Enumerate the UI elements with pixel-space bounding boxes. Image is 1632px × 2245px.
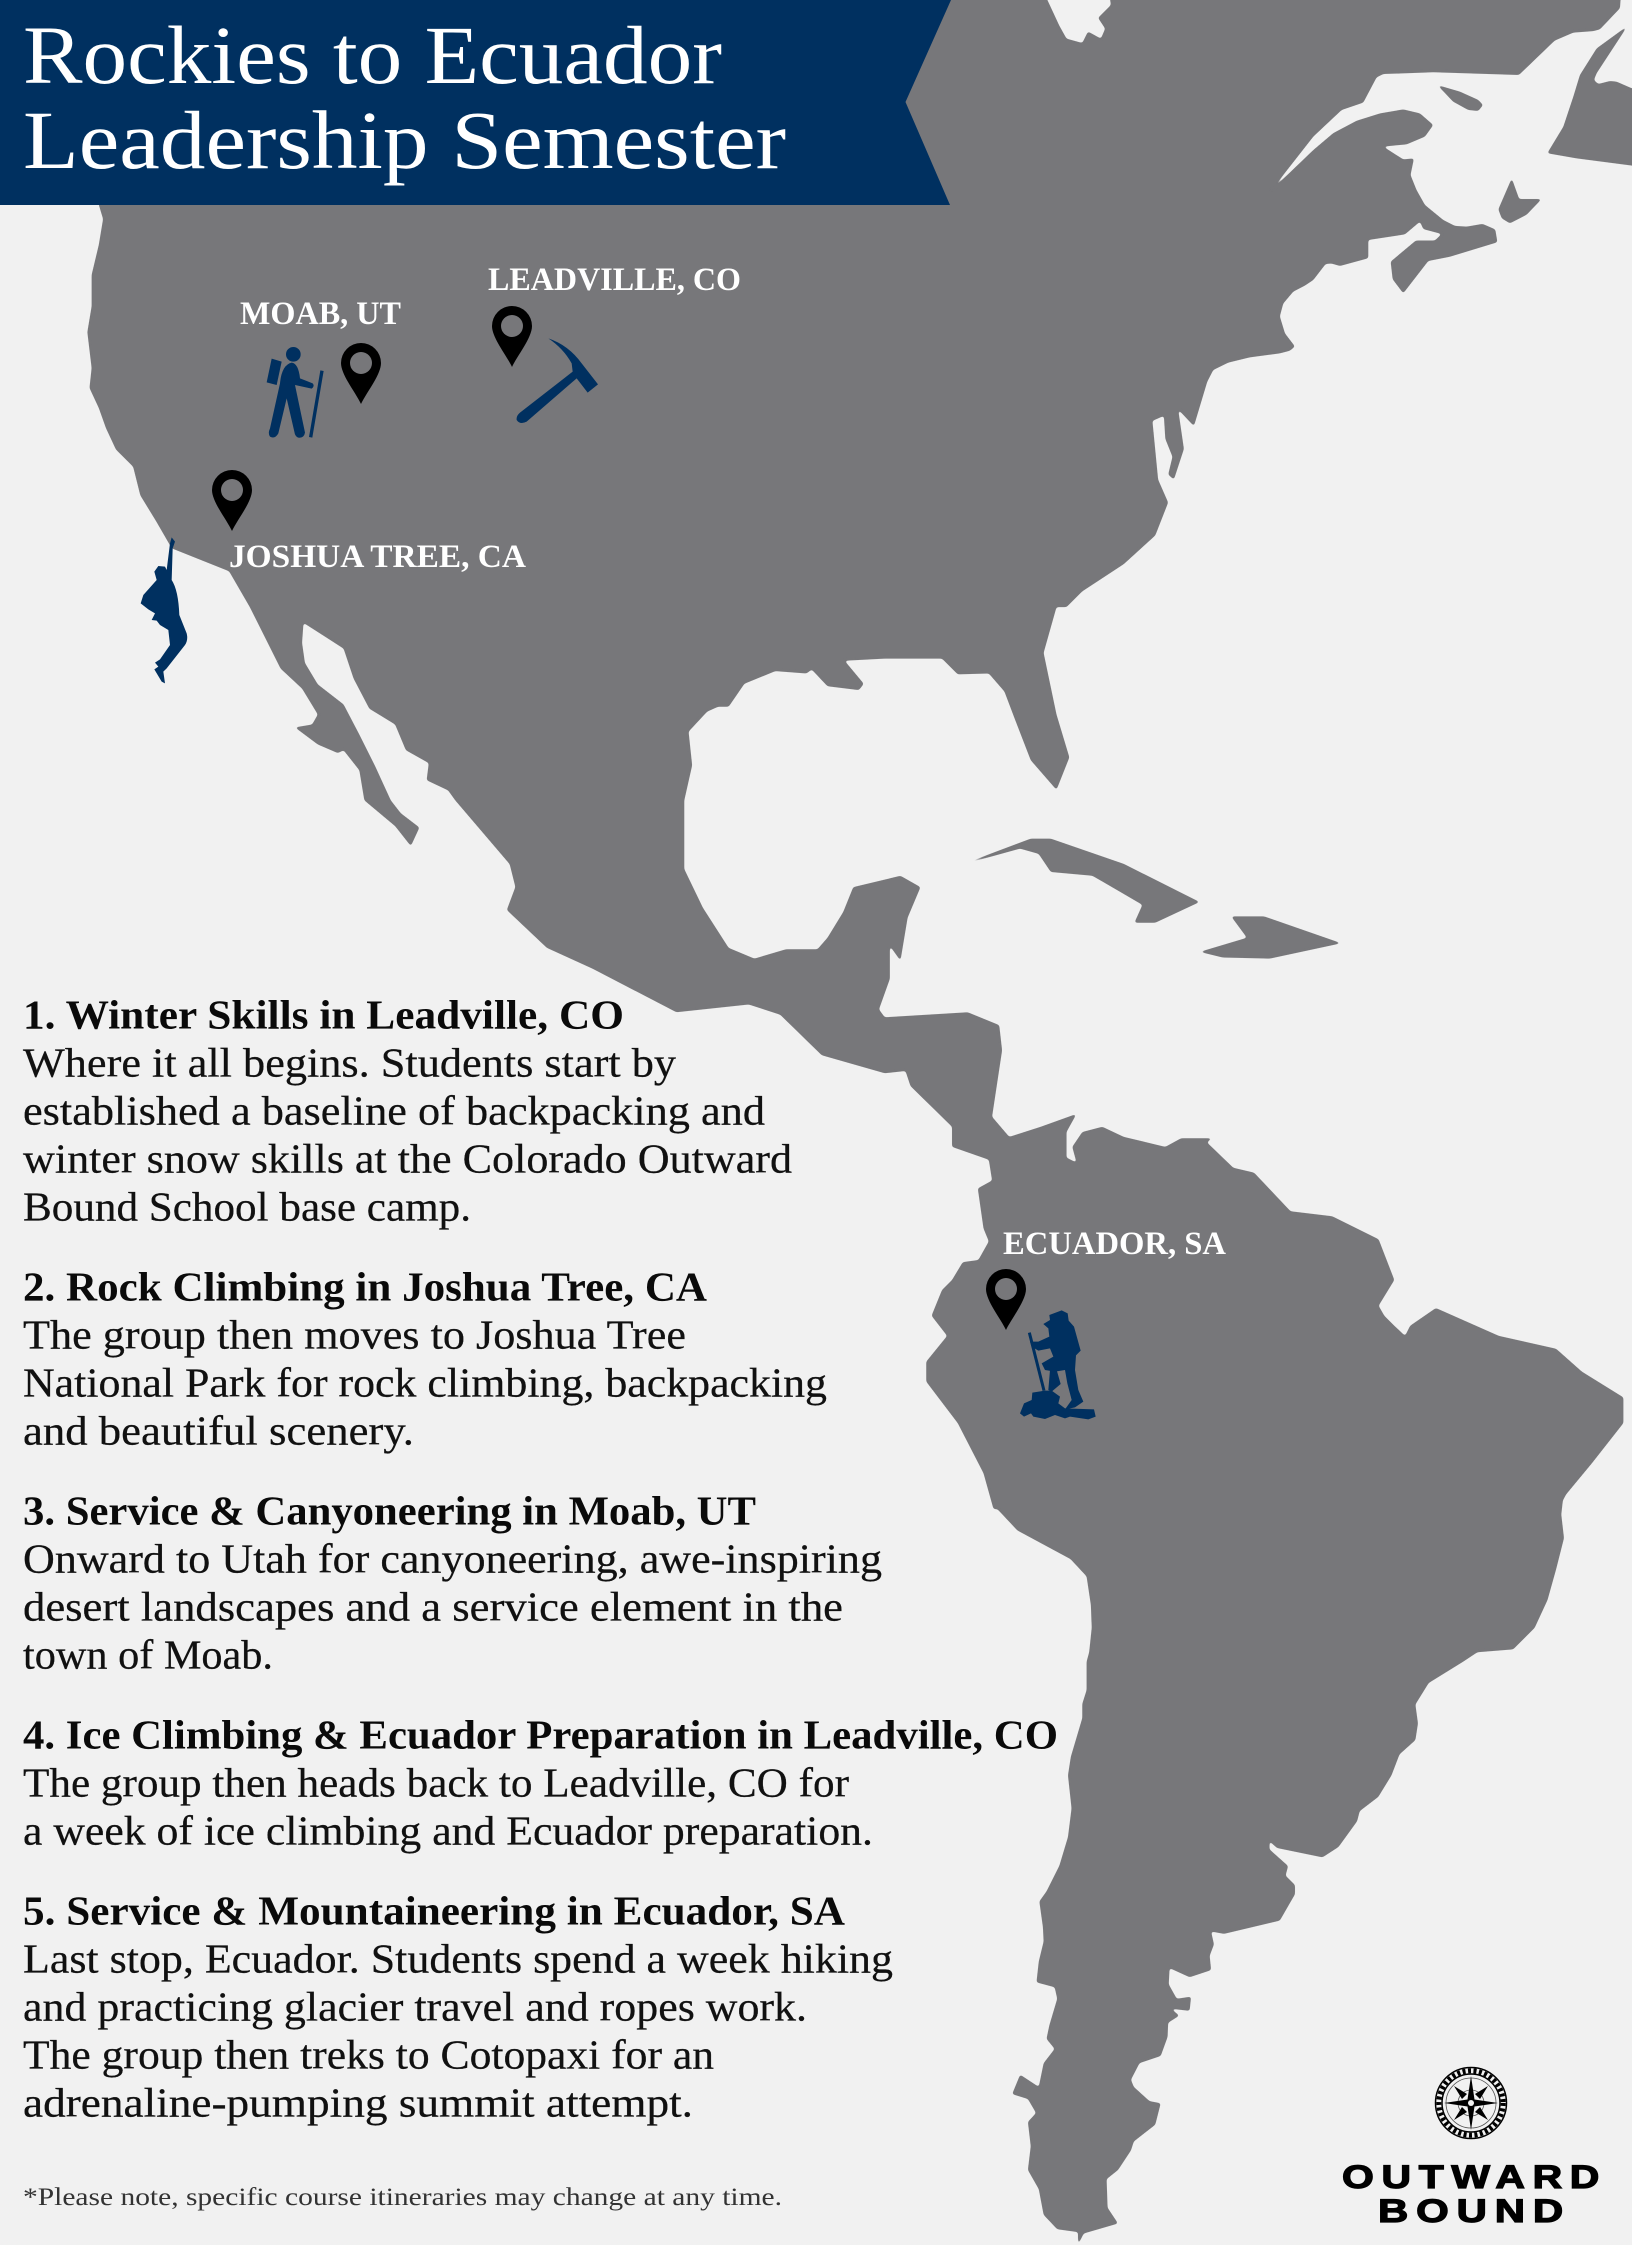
stop 2: Rock Climbing: National Park for rock climbing, backpacking xyxy=(23,1359,827,1405)
landmass: Anticosti Island xyxy=(1437,85,1483,111)
banner ribbon shape xyxy=(0,0,951,205)
stop 4: Ice Climbing: a week of ice climbing and Ecuador preparation. xyxy=(23,1807,873,1853)
stop 4: Ice Climbing: 4. Ice Climbing & Ecuador Preparation in Leadville, CO xyxy=(23,1711,1058,1757)
icon: Moab map pin xyxy=(341,343,381,404)
stop 1: Winter Skills: 1. Winter Skills in Leadville, CO xyxy=(23,991,624,1037)
stop 4: Ice Climbing xyxy=(23,1711,1058,1853)
landmass: Baffin Island xyxy=(1547,26,1632,168)
stop 1: Winter Skills: Where it all begins. Students start by xyxy=(23,1039,677,1085)
label: Joshua Tree, CA: JOSHUA TREE, CA xyxy=(229,539,526,575)
title line 2: Leadership Semester xyxy=(23,94,786,186)
icon: Leadville map pin xyxy=(492,306,532,367)
stop 5: Service and Mountaineering: The group then treks to Cotopaxi for an xyxy=(23,2031,714,2077)
icon: mountaineer silhouette xyxy=(1020,1310,1096,1419)
stop 2: Rock Climbing: 2. Rock Climbing in Joshua Tree, CA xyxy=(23,1263,707,1309)
wordmark line 1: OUTWARD xyxy=(1342,2159,1607,2195)
landmass: Cuba xyxy=(959,839,1200,923)
stop 3: Service and Canyoneering: Onward to Utah for canyoneering, awe-inspiring xyxy=(23,1535,882,1581)
stop 5: Service and Mountaineering: 5. Service & Mountaineering in Ecuador, SA xyxy=(23,1887,845,1933)
icon: ice axe xyxy=(517,338,598,423)
landmass: Hispaniola xyxy=(1200,916,1341,959)
title line 1: Rockies to Ecuador xyxy=(23,9,722,101)
label: Ecuador, SA: ECUADOR, SA xyxy=(1003,1226,1226,1262)
stop 3: Service and Canyoneering: 3. Service & Canyoneering in Moab, UT xyxy=(23,1487,756,1533)
stop 5: Service and Mountaineering xyxy=(23,1887,893,2125)
stop 5: Service and Mountaineering: and practicing glacier travel and ropes work. xyxy=(23,1983,807,2029)
stop 1: Winter Skills: winter snow skills at the Colorado Outward xyxy=(23,1135,792,1181)
title banner xyxy=(0,0,951,205)
label: Leadville, CO: LEADVILLE, CO xyxy=(488,262,741,298)
stop 1: Winter Skills: established a baseline of backpacking and xyxy=(23,1087,765,1133)
icon: Ecuador map pin xyxy=(986,1269,1026,1330)
stop 2: Rock Climbing: The group then moves to Joshua Tree xyxy=(23,1311,686,1357)
footnote: *Please note, specific course itineraries may change at any time. xyxy=(23,2184,782,2211)
stop 3: Service and Canyoneering xyxy=(23,1487,882,1677)
stop 1: Winter Skills: Bound School base camp. xyxy=(23,1183,471,1229)
icon: Joshua Tree map pin xyxy=(212,470,252,531)
label: Moab, UT: MOAB, UT xyxy=(240,296,401,332)
itinerary text xyxy=(23,991,1058,2125)
stop 3: Service and Canyoneering: town of Moab. xyxy=(23,1631,273,1677)
icon: rock climber silhouette xyxy=(141,537,187,683)
stop 5: Service and Mountaineering: Last stop, Ecuador. Students spend a week hiking xyxy=(23,1935,893,1981)
stop 2: Rock Climbing xyxy=(23,1263,827,1453)
stop 2: Rock Climbing: and beautiful scenery. xyxy=(23,1407,414,1453)
stop 1: Winter Skills xyxy=(23,991,792,1229)
icon: hiker with backpack and pole xyxy=(267,347,322,438)
stop 5: Service and Mountaineering: adrenaline-pumping summit attempt. xyxy=(23,2079,693,2125)
landmass: Newfoundland xyxy=(1498,178,1542,223)
stop 4: Ice Climbing: The group then heads back to Leadville, CO for xyxy=(23,1759,849,1805)
icon: compass rose xyxy=(1436,2068,1506,2138)
logo: Outward Bound xyxy=(1342,2068,1607,2229)
wordmark line 2: BOUND xyxy=(1378,2193,1571,2229)
stop 3: Service and Canyoneering: desert landscapes and a service element in the xyxy=(23,1583,843,1629)
